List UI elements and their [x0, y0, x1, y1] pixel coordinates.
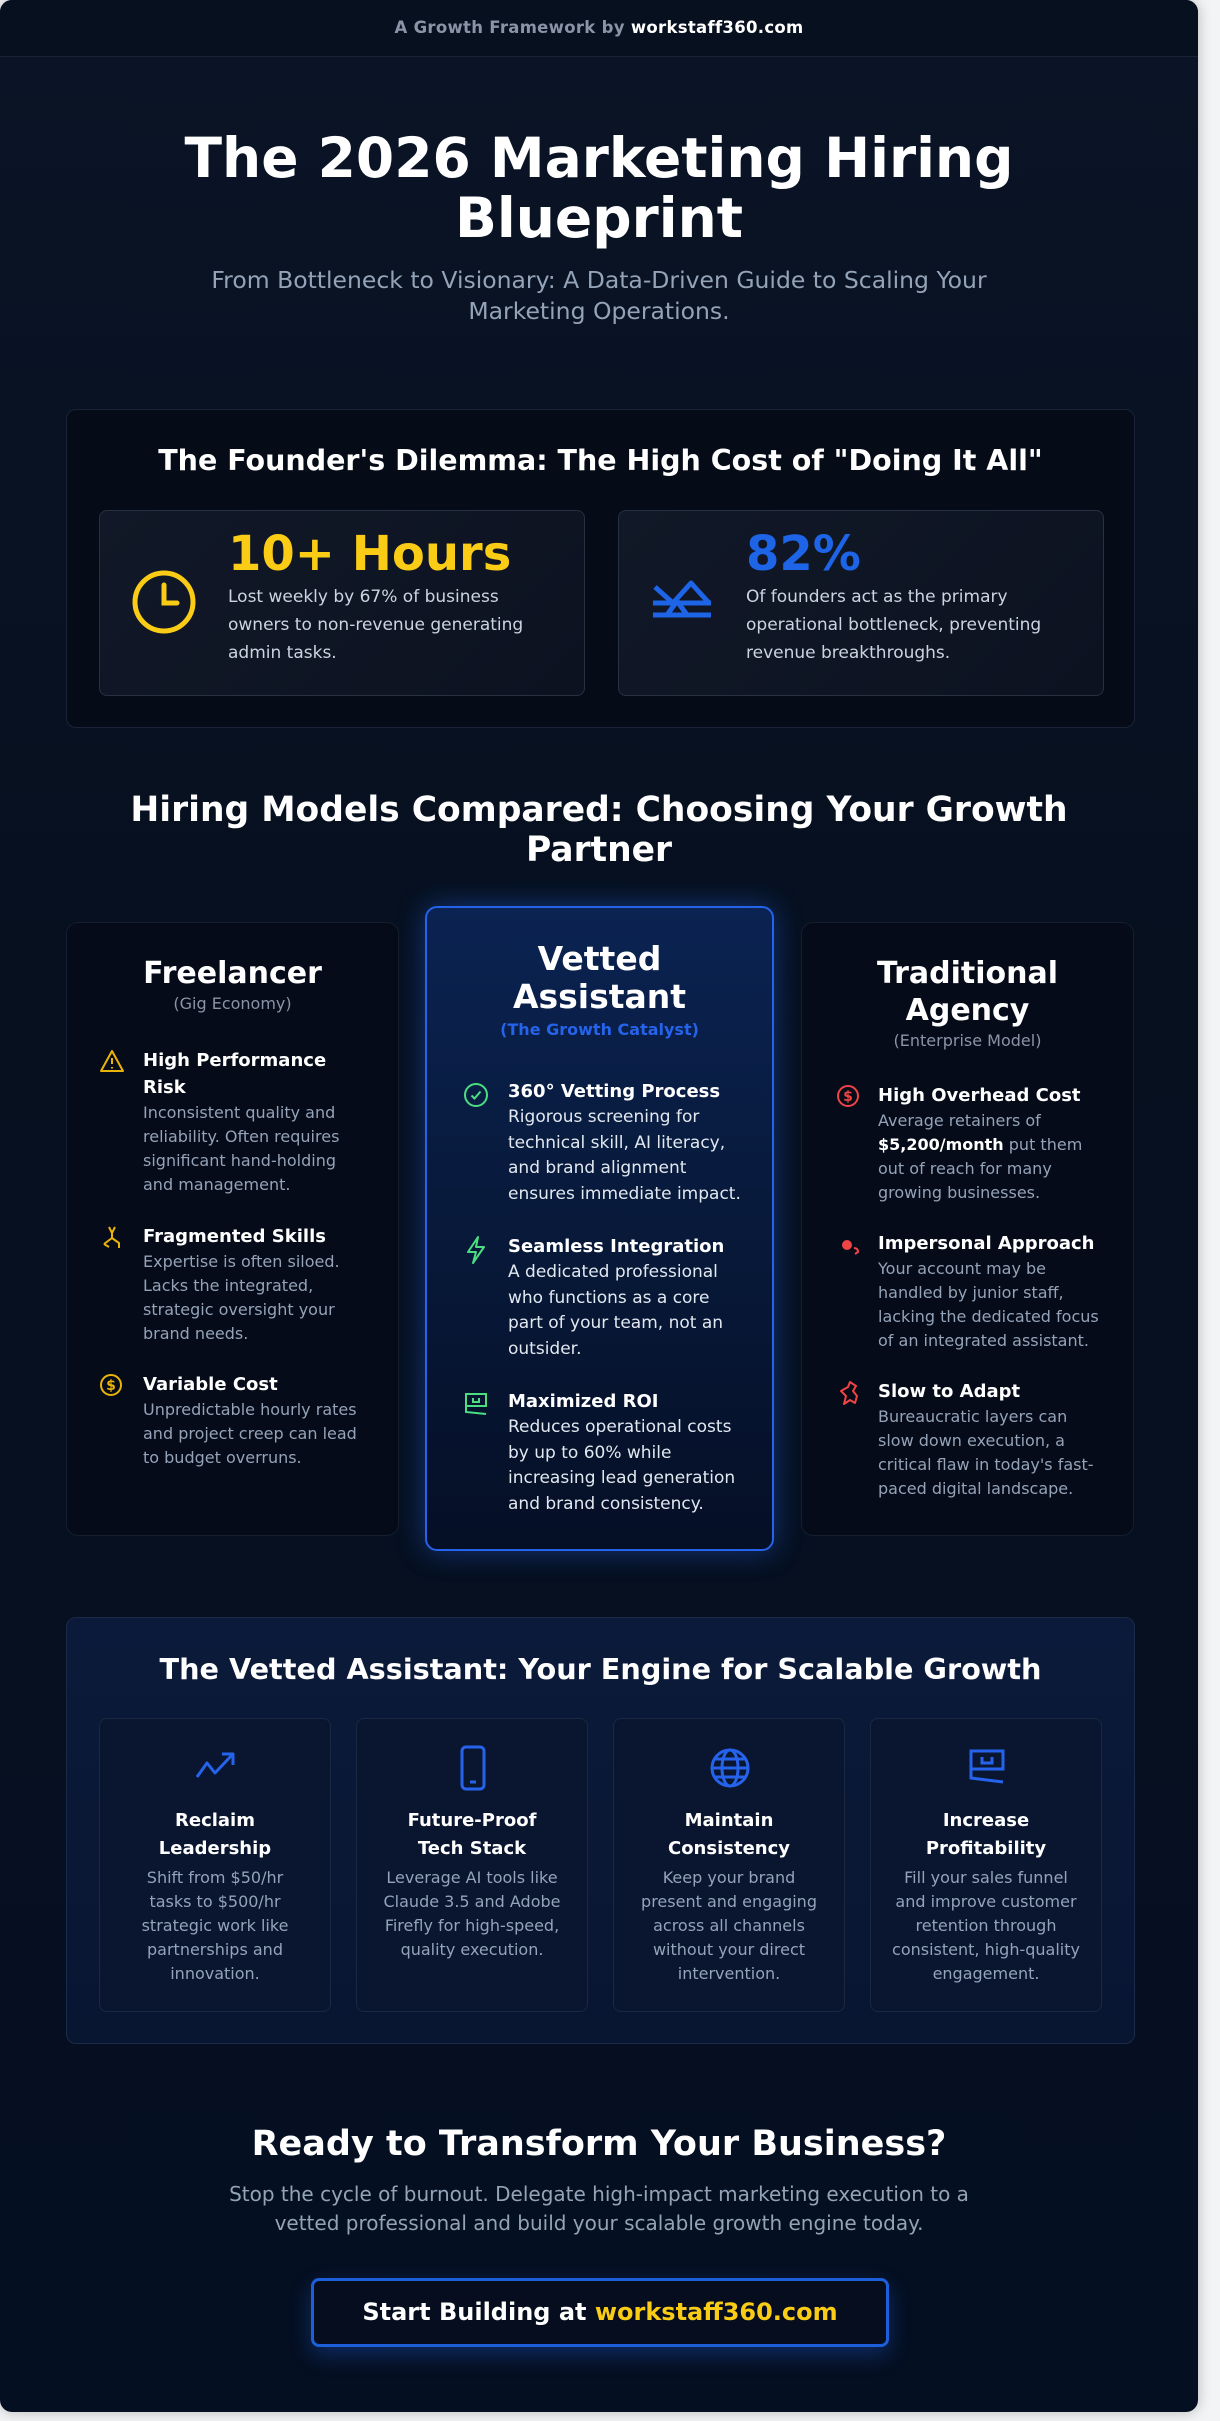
item: vetting process	[464, 1081, 741, 1204]
stat card: 10+ hours	[99, 510, 585, 696]
icon: bottleneck	[653, 580, 711, 618]
item: overhead cost: $	[843, 1089, 853, 1105]
item: seamless integration: Seamless Integration	[508, 1236, 724, 1257]
freelancer title: (Gig Economy)	[173, 994, 292, 1013]
item: seamless integration	[467, 1236, 724, 1358]
panel: vetted assistant (highlighted)	[425, 906, 774, 1551]
item: vetting process: 360° Vetting Process	[508, 1081, 720, 1102]
item: vetting process: Rigorous screening for technical skill, AI literacy, and brand alignment ensures immediate impact.	[508, 1107, 741, 1204]
title: The 2026 Marketing Hiring	[185, 126, 1013, 190]
item: slow to adapt: Bureaucratic layers can slow down execution, a critical flaw in today's fast-paced digital landscape.	[878, 1407, 1094, 1498]
cta button	[311, 2278, 889, 2347]
heading: growth engine: The Vetted Assistant: Your Engine for Scalable Growth	[160, 1652, 1041, 1686]
item: slow to adapt	[840, 1381, 1094, 1498]
agency title: Agency	[906, 993, 1029, 1028]
benefit: reclaim leadership: Reclaim	[175, 1810, 255, 1831]
stat text: 82%	[746, 526, 861, 582]
panel: freelancer	[66, 922, 399, 1536]
cta text: Stop the cycle of burnout. Delegate high-impact marketing execution to a vetted professional and build your scalable growth engine today.	[229, 2182, 969, 2235]
item: variable cost: Unpredictable hourly rates and project creep can lead to budget overruns.	[143, 1400, 357, 1467]
agency title	[877, 956, 1058, 1050]
header bar: A Growth Framework by workstaff360.com	[394, 18, 804, 37]
item: fragmented skills	[104, 1226, 340, 1343]
item: fragmented skills: Expertise is often siloed. Lacks the integrated, strategic oversight your brand needs.	[143, 1252, 340, 1343]
benefit: tech stack: Leverage AI tools like Claude 3.5 and Adobe Firefly for high-speed, quality execution.	[384, 1868, 560, 1959]
benefit: reclaim leadership: Leadership	[159, 1838, 271, 1859]
item: overhead cost: Average retainers of $5,200/month put them out of reach for many growing businesses.	[878, 1111, 1082, 1202]
item: performance risk: Inconsistent quality and reliability. Often requires significant hand-holding and management.	[143, 1103, 339, 1194]
item: overhead cost	[837, 1085, 1082, 1202]
item: variable cost: $	[106, 1378, 116, 1394]
heading: dilemma: The Founder's Dilemma: The High Cost of "Doing It All"	[158, 444, 1043, 477]
benefit: profitability	[870, 1718, 1102, 2012]
item: impersonal approach	[842, 1233, 1099, 1350]
panel: traditional agency	[801, 922, 1134, 1536]
item: slow to adapt: Slow to Adapt	[878, 1381, 1020, 1402]
benefit: reclaim leadership	[99, 1718, 331, 2012]
cta button: Start Building at workstaff360.com	[362, 2298, 838, 2326]
item: impersonal approach: Impersonal Approach	[878, 1233, 1094, 1254]
item: fragmented skills: Fragmented Skills	[143, 1226, 326, 1247]
benefit: reclaim leadership: Shift from $50/hr tasks to $500/hr strategic work like partnerships and innovation.	[142, 1868, 288, 1983]
agency title: Traditional	[877, 956, 1058, 991]
item: impersonal approach: Your account may be handled by junior staff, lacking the dedicated focus of an integrated assistant.	[878, 1259, 1099, 1350]
benefit: consistency	[613, 1718, 845, 2012]
header bar	[0, 0, 1198, 57]
benefit: profitability: Profitability	[926, 1838, 1046, 1859]
item: maximized roi: Maximized ROI	[508, 1391, 658, 1412]
panel: growth engine	[66, 1617, 1135, 2044]
item: performance risk: High Performance Risk	[143, 1050, 326, 1098]
item: variable cost: Variable Cost	[143, 1374, 278, 1395]
benefit: tech stack: Future-Proof	[408, 1810, 536, 1831]
title	[184, 126, 1013, 250]
benefit: consistency: Keep your brand present and engaging across all channels without your direct intervention.	[641, 1868, 817, 1983]
vetted title: Assistant	[513, 977, 686, 1016]
vetted title	[500, 939, 699, 1039]
stat text: Of founders act as the primary operational bottleneck, preventing revenue breakthroughs.	[746, 587, 1041, 663]
benefit: tech stack	[356, 1718, 588, 2012]
heading: hiring models: Hiring Models Compared: Choosing Your Growth Partner	[130, 790, 1068, 870]
item: maximized roi: Reduces operational costs by up to 60% while increasing lead generation and brand consistency.	[508, 1417, 735, 1514]
benefit: profitability: Increase	[943, 1810, 1029, 1831]
item: performance risk	[100, 1050, 339, 1194]
cta heading: Ready to Transform Your Business?	[252, 2124, 946, 2164]
benefit: consistency: Consistency	[668, 1838, 790, 1859]
stat text	[746, 526, 1041, 663]
subtitle: From Bottleneck to Visionary: A Data-Driven Guide to Scaling Your Marketing Operations.	[211, 266, 987, 325]
icon: clock	[132, 570, 196, 634]
benefit: profitability: Fill your sales funnel and improve customer retention through consistent, high-quality engagement.	[892, 1868, 1080, 1983]
item: overhead cost: High Overhead Cost	[878, 1085, 1081, 1106]
agency title: (Enterprise Model)	[894, 1031, 1041, 1050]
panel: founder's dilemma	[66, 409, 1135, 728]
freelancer title	[143, 956, 322, 1013]
item: maximized roi	[465, 1391, 735, 1514]
stat text: Lost weekly by 67% of business owners to non-revenue generating admin tasks.	[228, 587, 523, 663]
stat card: 82%	[618, 510, 1104, 696]
benefit: tech stack: Tech Stack	[418, 1838, 526, 1859]
stat text	[228, 526, 523, 663]
stat text: 10+ Hours	[228, 526, 511, 582]
item: seamless integration: A dedicated professional who functions as a core part of your team, not an outsider.	[508, 1262, 723, 1358]
freelancer title: Freelancer	[143, 956, 322, 991]
item: variable cost	[100, 1374, 357, 1467]
benefit: consistency: Maintain	[685, 1810, 773, 1831]
title: Blueprint	[455, 186, 743, 250]
vetted title: Vetted	[538, 939, 661, 978]
vetted title: (The Growth Catalyst)	[500, 1020, 699, 1039]
